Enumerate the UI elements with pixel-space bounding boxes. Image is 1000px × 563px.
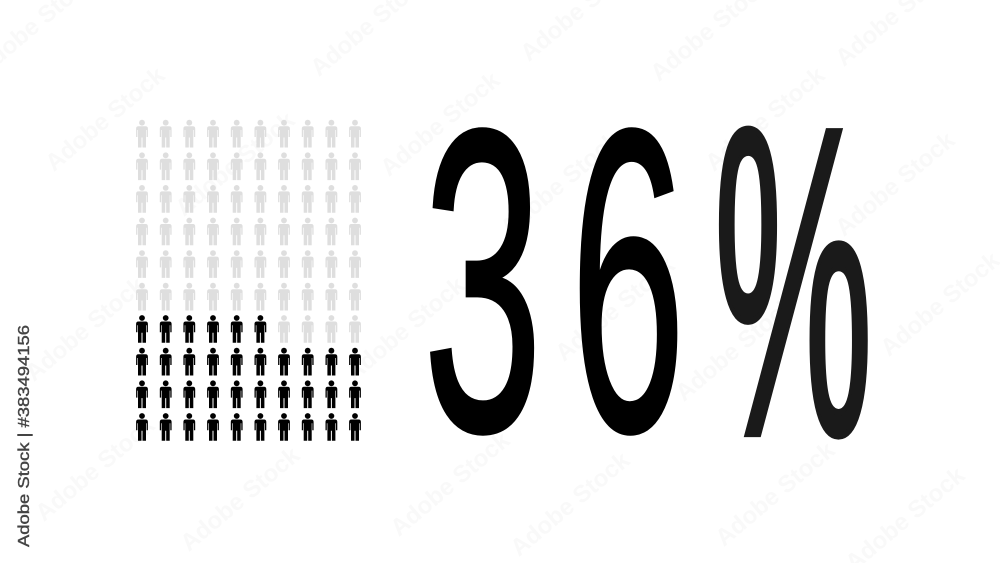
black people: 36 filled figures <box>136 315 361 441</box>
digit 3: 3 <box>423 41 543 522</box>
digit 6: 6 <box>570 40 685 521</box>
watermark pattern: Adobe Stock <box>670 291 801 407</box>
watermark pattern: Adobe Stock <box>385 426 516 542</box>
watermark pattern: Adobe Stock <box>40 61 171 177</box>
percent sign: % <box>714 37 873 527</box>
big percentage: 36% <box>423 37 873 527</box>
watermark pattern: Adobe Stock <box>340 271 471 387</box>
watermark pattern: Adobe Stock <box>550 251 681 367</box>
watermark pattern: Adobe Stock <box>170 106 301 222</box>
watermark pattern: Adobe Stock <box>175 441 306 557</box>
watermark pattern: Adobe Stock <box>700 61 831 177</box>
watermark pattern: Adobe Stock <box>830 126 961 242</box>
watermark pattern: Adobe Stock <box>710 436 841 552</box>
watermark pattern: Adobe Stock <box>30 411 161 527</box>
watermark pattern: Adobe Stock <box>20 271 151 387</box>
gray people: 64 unfilled figures <box>136 120 361 343</box>
watermark pattern: Adobe Stock <box>505 446 636 562</box>
stock id caption: Adobe Stock | #383494156 <box>16 325 33 547</box>
watermark pattern: Adobe Stock <box>495 126 626 242</box>
watermark pattern: Adobe Stock <box>375 66 506 182</box>
people grid: 36 of 100 highlighted <box>136 120 361 441</box>
